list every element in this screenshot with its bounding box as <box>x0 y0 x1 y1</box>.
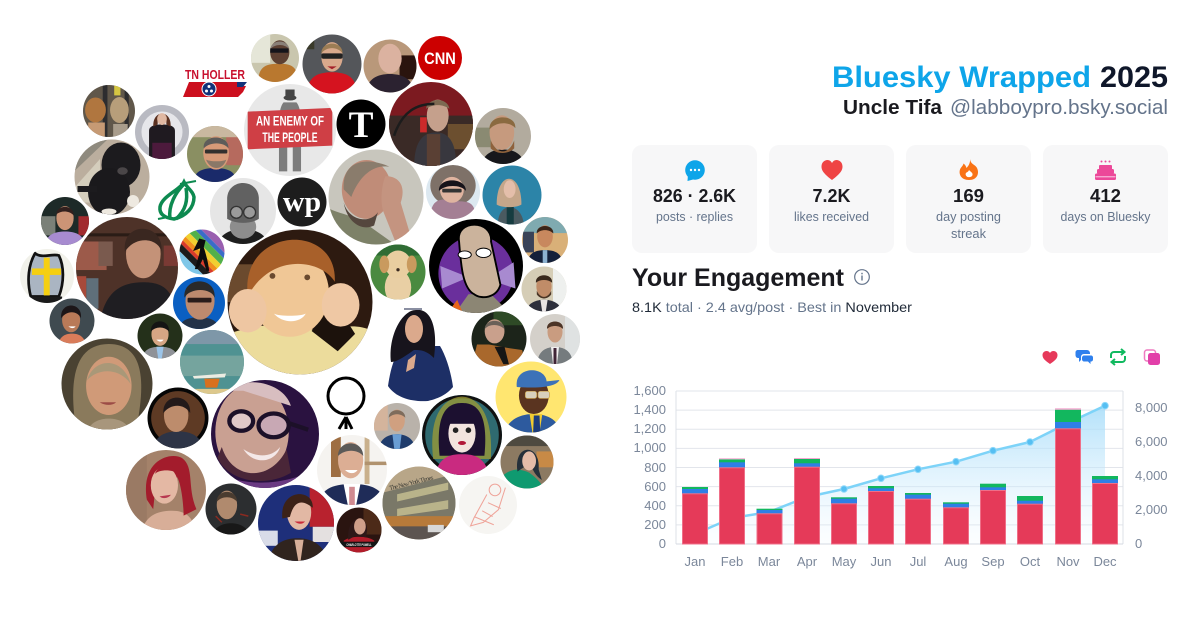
logo: CNN <box>418 36 462 80</box>
icon: likes <box>1042 351 1058 364</box>
avatar: man with bookshelves <box>76 217 178 319</box>
avatar: older person in tan jacket <box>472 312 526 366</box>
right axis labels <box>1135 400 1168 551</box>
month labels: May <box>832 554 857 569</box>
logo: TN Holler: TN HOLLER <box>185 67 245 82</box>
avatar: woman with flag <box>258 485 334 561</box>
logo: An Enemy of the People: AN ENEMY OF <box>256 113 324 128</box>
avatar: woman in red <box>302 34 362 94</box>
avatar: bald man <box>364 40 416 92</box>
avatar: woman with long grey-blonde hair <box>62 338 152 430</box>
avatar: smiling man purple tint <box>211 380 319 488</box>
avatar: blonde woman by sea <box>482 166 542 224</box>
chart legend icons <box>1042 349 1160 365</box>
avatar: man in dark room <box>206 484 256 534</box>
right axis labels: 0 <box>1135 536 1142 551</box>
icon: reposts <box>1111 349 1125 365</box>
left axis labels: 600 <box>644 479 666 494</box>
month labels: Dec <box>1093 554 1117 569</box>
avatar: bearded man <box>522 266 566 312</box>
stat card: days on Bluesky: 412 <box>1090 186 1121 206</box>
icon: replies <box>1076 350 1093 364</box>
avatar: New York Times building <box>382 466 456 540</box>
logo: An Enemy of the People <box>244 84 336 176</box>
stat card: posts and replies <box>632 145 757 253</box>
month labels: Nov <box>1056 554 1080 569</box>
avatar: golden retriever puppy <box>370 244 426 305</box>
avatar: two dogs <box>83 85 135 137</box>
left axis labels: 800 <box>644 460 666 475</box>
avatar: man in blue jacket <box>374 403 420 449</box>
month labels: Jun <box>871 554 891 569</box>
icon: heart <box>822 160 842 180</box>
stat card: day posting streak: streak <box>951 226 986 241</box>
stat card: likes received: likes received <box>794 209 869 224</box>
subtitle: name and handle: Uncle Tifa <box>843 97 943 119</box>
icon: cake <box>1095 160 1116 180</box>
avatar: man in grey suit <box>530 314 580 364</box>
logo: Washington Post <box>278 178 326 226</box>
cutout: woman in navy blazer <box>388 309 453 401</box>
title: 2025 <box>1100 61 1168 94</box>
stacked bars <box>682 408 1118 544</box>
avatar: man in orange shirt <box>251 34 299 82</box>
avatar: beach scene <box>180 330 244 394</box>
avatar: New York Times building: The New York Times <box>389 474 435 492</box>
stat card: day posting streak: 169 <box>953 186 984 206</box>
logo: TN Holler <box>183 67 247 97</box>
right axis labels: 6,000 <box>1135 434 1168 449</box>
month labels: Feb <box>721 554 743 569</box>
icon: speech bubble <box>685 160 705 181</box>
avatar: smiling man with cross <box>317 435 387 505</box>
stat card: posts and replies: posts · replies <box>656 209 733 224</box>
subtitle: name and handle: @labboypro.bsky.social <box>950 97 1168 119</box>
avatar: man in purple shirt <box>41 197 89 245</box>
icon: flame <box>960 159 978 180</box>
month labels: Aug <box>944 554 968 569</box>
avatar: young man in grey suit <box>138 314 182 358</box>
stat card: likes received <box>769 145 894 253</box>
avatar: woman with red hair <box>126 450 206 530</box>
left axis labels: 1,400 <box>633 402 666 417</box>
grid lines <box>676 391 1123 544</box>
avatar: illustrated girl with bangs <box>422 395 502 475</box>
icon: quotes <box>1144 350 1160 365</box>
left axis labels: 200 <box>644 517 666 532</box>
avatar: woman in dark top <box>135 105 189 159</box>
left axis labels <box>633 383 666 551</box>
engagement chart <box>633 383 1168 569</box>
month labels: Jul <box>910 554 926 569</box>
avatar: smiling man with glasses <box>187 126 243 182</box>
avatar: woman with short dark hair <box>50 298 94 344</box>
logo: An Enemy of the People: THE PEOPLE <box>262 130 318 145</box>
engagement summary: 8.1K total · 2.4 avg/post · Best in November <box>632 299 912 315</box>
avatar: sketch drawing <box>459 476 517 534</box>
logo: Washington Post: wp <box>283 187 321 218</box>
avatar: woman in fur hood <box>426 165 480 219</box>
left axis labels: 1,200 <box>633 421 666 436</box>
icon: info <box>855 270 869 284</box>
avatar bubble cluster <box>20 34 580 561</box>
month labels: Jan <box>685 554 705 569</box>
stat card: posts and replies: 826 · 2.6K <box>653 186 736 206</box>
stat card: days on Bluesky: days on Bluesky <box>1060 209 1151 224</box>
avatar: mitre icon <box>20 249 74 303</box>
logo: The Onion <box>158 181 196 219</box>
right axis labels: 4,000 <box>1135 468 1168 483</box>
stat card: day posting streak: day posting <box>936 209 1001 224</box>
logo: New York Times: T <box>349 105 374 146</box>
left axis labels: 1,000 <box>633 440 666 455</box>
stat card: day posting streak <box>906 145 1031 253</box>
icon: stick figure <box>328 378 364 429</box>
logo: New York Times <box>336 100 386 148</box>
avatar: cartoon bald man <box>429 219 523 313</box>
left axis labels: 400 <box>644 498 666 513</box>
avatar: woman in green <box>500 436 554 488</box>
month labels: Mar <box>758 554 781 569</box>
month labels <box>685 554 1117 569</box>
avatar: man with glasses on blue <box>173 277 225 329</box>
subtitle: name and handle <box>843 97 1168 119</box>
logo: CNN: CNN <box>424 49 456 68</box>
avatar: man in suit at sunset <box>522 217 568 263</box>
avatar: black fluffy dog <box>74 140 150 216</box>
avatar: man in car <box>389 82 473 166</box>
heading: your engagement: Your Engagement <box>632 264 845 292</box>
right axis labels: 2,000 <box>1135 502 1168 517</box>
avatar: man in dark frame <box>148 388 208 448</box>
right axis labels: 8,000 <box>1135 400 1168 415</box>
month labels: Apr <box>797 554 818 569</box>
stat card: days on Bluesky <box>1043 145 1168 253</box>
avatar: woman in red on stage: CHARLOTTE POWELL <box>346 543 372 547</box>
avatar: man in metal mask <box>210 178 276 244</box>
avatar: woman in red on stage <box>336 508 382 552</box>
avatar: cartoon man in blue cap <box>496 362 566 432</box>
left axis labels: 0 <box>659 536 666 551</box>
left axis labels: 1,600 <box>633 383 666 398</box>
avatar: man with forehead mark <box>475 108 531 164</box>
avatar: rainbow silhouette <box>180 230 224 274</box>
stat card: likes received: 7.2K <box>812 186 850 206</box>
avatar: child photo (main profile) <box>228 230 372 374</box>
month labels: Oct <box>1020 554 1040 569</box>
cumulative line <box>695 402 1108 544</box>
month labels: Sep <box>981 554 1005 569</box>
title: Bluesky Wrapped <box>832 61 1091 94</box>
avatar: man resting head on hand <box>328 150 424 244</box>
